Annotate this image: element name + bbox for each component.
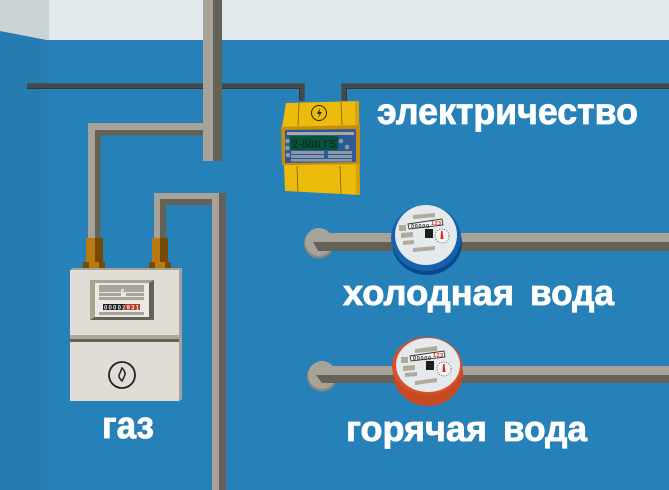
panel and display: 2-888 Г5 <box>292 140 336 150</box>
gas pipes <box>88 0 226 490</box>
electric wires <box>27 86 669 101</box>
hot water meter <box>392 337 463 406</box>
dial details: 00000 <box>411 224 429 230</box>
dial details: 123 <box>431 221 441 227</box>
gas meter <box>70 238 182 401</box>
icon: gas flame <box>109 362 135 388</box>
dial window <box>90 280 154 320</box>
label: hot water <box>346 408 588 449</box>
cold water meter <box>391 205 462 275</box>
label: hot water: горячая <box>346 408 487 449</box>
meter body <box>70 268 182 401</box>
label: cold water: вода <box>530 272 615 313</box>
icon: lightning <box>312 106 326 120</box>
label: cold water: холодная <box>343 272 514 313</box>
dial window: 00002931 <box>104 306 140 312</box>
label: cold water <box>343 272 615 313</box>
label: gas: газ <box>102 405 154 447</box>
dial details: 123 <box>433 353 443 359</box>
electricity meter <box>281 101 360 195</box>
cold water pipe <box>304 228 669 258</box>
brass couplings <box>83 238 171 271</box>
label: electricity: электричество <box>377 91 638 132</box>
body <box>281 101 360 195</box>
dial details <box>399 213 449 252</box>
label: hot water: вода <box>503 408 588 449</box>
hot water pipe <box>307 361 669 392</box>
dial details: 00000 <box>413 356 431 362</box>
dial details <box>401 346 451 385</box>
